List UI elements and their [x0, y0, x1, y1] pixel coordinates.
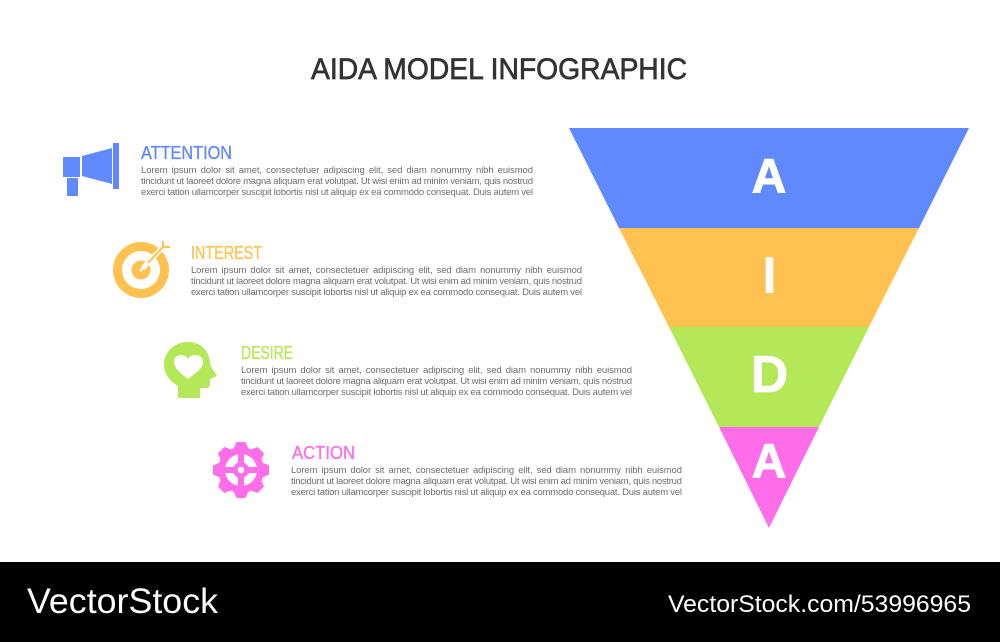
heading: attention: ATTENTION: [141, 142, 232, 163]
text block: desire: [241, 365, 632, 398]
funnel band: D desire: [669, 327, 869, 427]
text block: interest: tincidunt ut laoreet dolore magna aliquam erat volutpat. Ut wisi enim ad minim veniam, quis nostrud: [191, 276, 582, 287]
text block: action: Lorem ipsum dolor sit amet, consectetuer adipiscing elit, sed diam nonummy nibh euismod: [291, 465, 682, 476]
text block: desire: exerci tation ullamcorper suscipit lobortis nisl ut aliquip ex ea commodo consequat. Duis autem vel: [241, 387, 632, 398]
text block: attention: [141, 165, 533, 198]
panel: interest: [113, 241, 582, 298]
text block: interest: exerci tation ullamcorper suscipit lobortis nisl ut aliquip ex ea commodo consequat. Duis autem vel: [191, 287, 582, 298]
funnel band: A action: A: [752, 436, 786, 488]
heading: interest: INTEREST: [191, 242, 262, 263]
heading: desire: DESIRE: [241, 342, 293, 363]
panel: desire: [164, 342, 632, 398]
funnel band: A action: [719, 427, 819, 528]
funnel band: A attention: A: [752, 150, 786, 204]
footer bar: [0, 562, 1000, 642]
icon: gear: [213, 442, 269, 498]
funnel band: A attention: [569, 128, 969, 228]
text block: desire: tincidunt ut laoreet dolore magna aliquam erat volutpat. Ut wisi enim ad minim veniam, quis nostrud: [241, 376, 632, 387]
icon: target with arrow: [113, 241, 170, 298]
icon: head with heart: [164, 342, 217, 398]
panel: attention: [63, 142, 533, 198]
text block: attention: exerci tation ullamcorper suscipit lobortis nisl ut aliquip ex ea commodo consequat. Duis autem vel: [141, 187, 533, 198]
funnel band: I interest: I: [762, 247, 777, 305]
funnel band: D desire: D: [751, 346, 788, 404]
text block: desire: Lorem ipsum dolor sit amet, consectetuer adipiscing elit, sed diam nonummy nibh euismod: [241, 365, 632, 376]
title: AIDA MODEL INFOGRAPHIC: [311, 53, 687, 86]
text block: attention: tincidunt ut laoreet dolore magna aliquam erat volutpat. Ut wisi enim ad minim veniam, quis nostrud: [141, 176, 533, 187]
heading: action: ACTION: [292, 442, 355, 463]
footer logo text: VectorStock: [27, 582, 219, 621]
text block: interest: Lorem ipsum dolor sit amet, consectetuer adipiscing elit, sed diam nonummy nibh euismod: [191, 265, 582, 276]
text block: interest: [191, 265, 582, 298]
text block: action: exerci tation ullamcorper suscipit lobortis nisl ut aliquip ex ea commodo consequat. Duis autem vel: [291, 487, 682, 498]
funnel band: I interest: [619, 228, 919, 327]
text block: attention: Lorem ipsum dolor sit amet, consectetuer adipiscing elit, sed diam nonummy nibh euismod: [141, 165, 533, 176]
text block: action: tincidunt ut laoreet dolore magna aliquam erat volutpat. Ut wisi enim ad minim veniam, quis nostrud: [291, 476, 682, 487]
footer image id: VectorStock.com/53996965: [668, 591, 971, 618]
text block: action: [291, 465, 682, 498]
funnel chart: [569, 128, 969, 528]
icon: megaphone: [63, 143, 119, 196]
panel: action: [213, 442, 682, 498]
